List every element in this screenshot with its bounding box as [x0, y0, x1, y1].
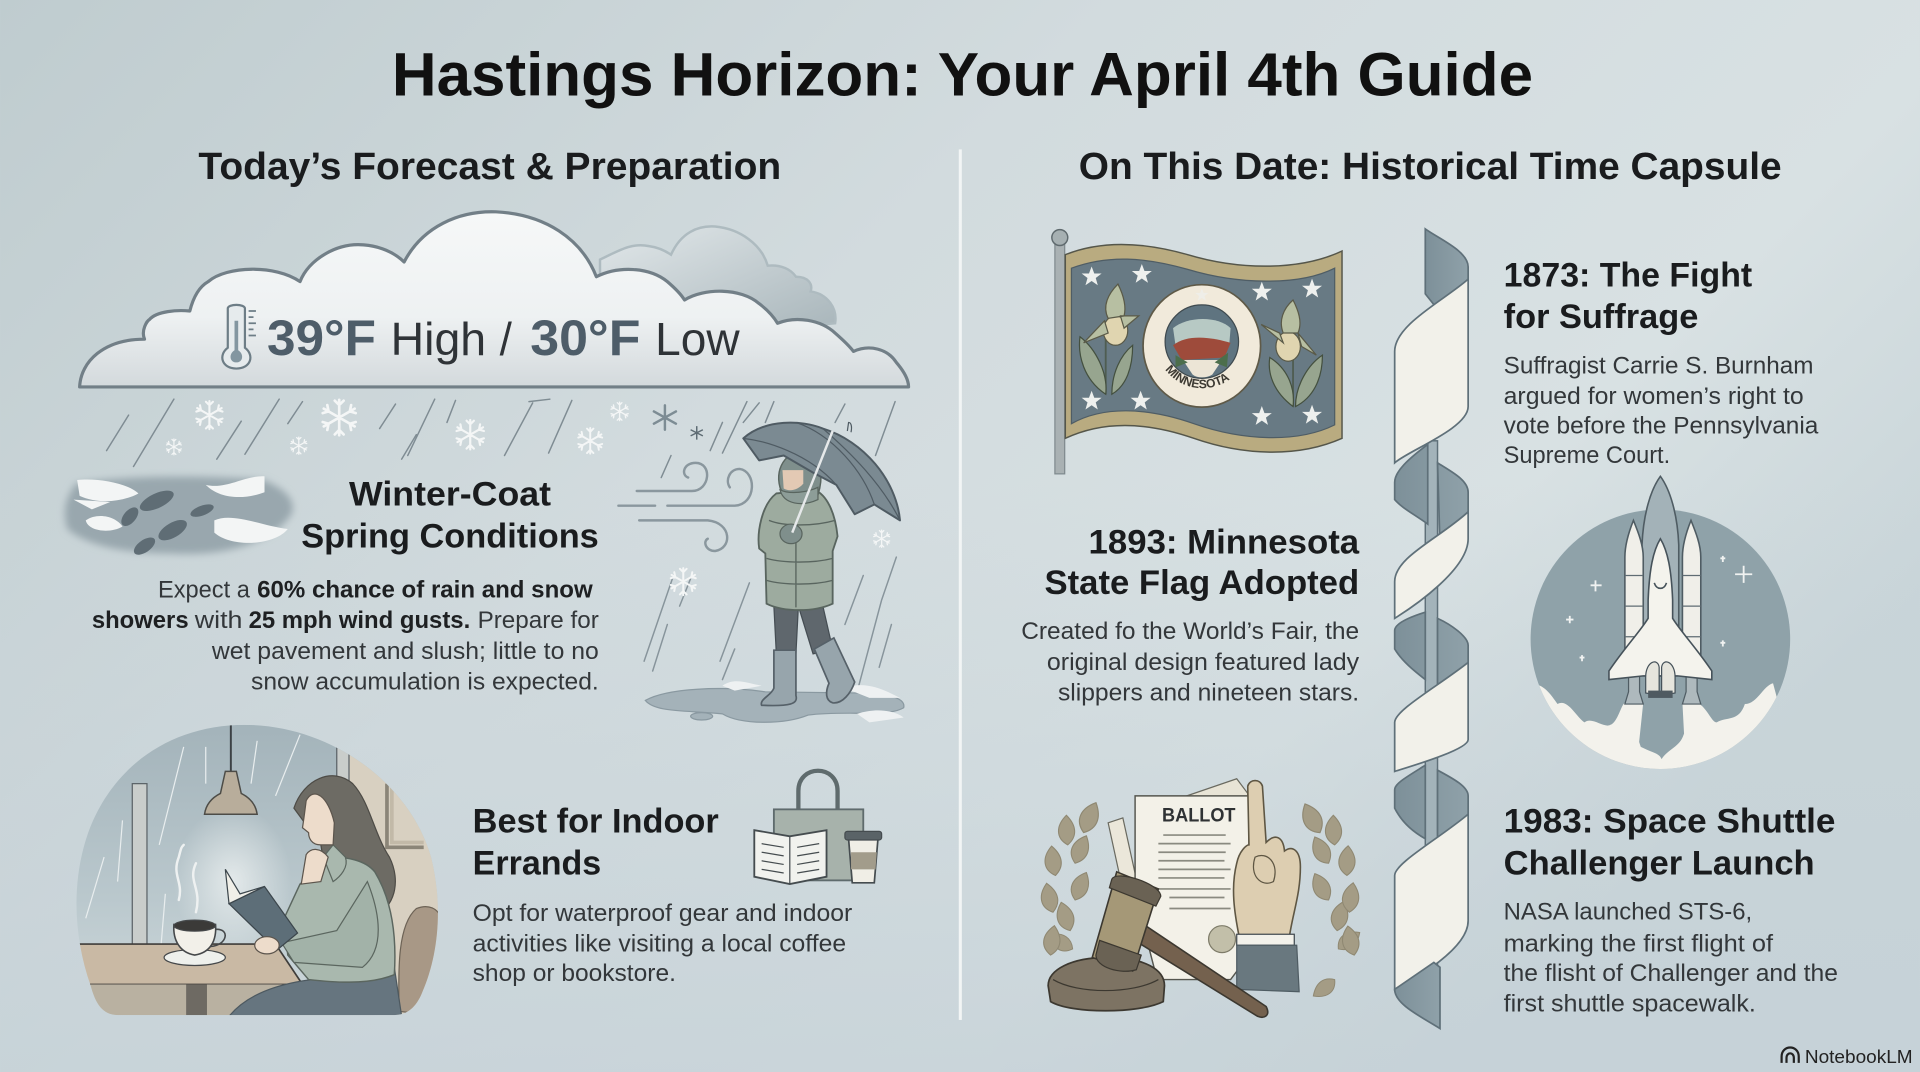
body: 1873 [1504, 352, 1819, 469]
puddle [645, 689, 904, 722]
heading: forecast: Today’s Forecast & Preparation [198, 146, 781, 188]
temperature readout: Low [655, 313, 740, 365]
face [302, 794, 334, 845]
heading: 1893: State Flag Adopted [1044, 564, 1359, 602]
body: rain and snow advice: 25 mph wind gusts. [249, 607, 470, 634]
hood and face [779, 450, 821, 501]
icon: space shuttle launch [1530, 475, 1790, 769]
heading: 1893: 1893: Minnesota [1089, 523, 1360, 561]
window frames [132, 784, 147, 949]
body: 1983: NASA launched STS-6, [1504, 899, 1752, 926]
stars [1566, 556, 1767, 686]
temperature readout: 39°F [267, 310, 376, 366]
hand on book [255, 937, 279, 954]
heading: 1983: 1983: Space Shuttle [1504, 803, 1835, 841]
illustration: person under umbrella in the rain [644, 422, 904, 722]
icon: thermometer [222, 305, 256, 369]
heading: 1893 [1044, 523, 1360, 602]
body: rain and snow advice: showers [92, 607, 189, 634]
event: 1983 space shuttle challenger launch [1504, 803, 1838, 1017]
text: winter-coat spring conditions [92, 476, 599, 695]
rain on glass [85, 734, 300, 944]
icon: rain and snow [107, 399, 895, 478]
body: indoor advice: activities like visiting a local coffee [473, 930, 846, 957]
body: indoor advice: Opt for waterproof gear and indoor [473, 900, 852, 927]
icon: wind swirls [618, 463, 752, 551]
body: 1893: slippers and nineteen stars. [1058, 679, 1359, 706]
rain lines [644, 557, 896, 692]
body: 1873: Supreme Court. [1504, 442, 1670, 469]
event: 1873 the fight for suffrage [1504, 257, 1819, 469]
umbrella [743, 423, 900, 520]
book [229, 886, 298, 950]
body: 1983: the flisht of Challenger and the [1504, 960, 1838, 987]
legs and boots [774, 606, 833, 654]
state seal: MINNESOTA [1166, 364, 1230, 388]
panel: today's forecast and preparation [65, 146, 909, 1021]
solid rocket boosters [1625, 520, 1701, 667]
text: best for indoor errands [473, 803, 852, 987]
hand on chin [301, 849, 328, 884]
icon: slushy puddle with footprints [65, 476, 293, 558]
divider [959, 149, 962, 1020]
event: 1893 minnesota state flag adopted [1021, 523, 1360, 706]
body: indoor advice [473, 900, 852, 987]
laurel wreaths [1039, 799, 1364, 1002]
heading: 1983: Challenger Launch [1504, 844, 1815, 882]
heading: history: On This Date: Historical Time Capsule [1079, 146, 1782, 188]
heading: 1983 [1504, 803, 1835, 882]
wall [350, 755, 438, 1014]
body: rain and snow advice: wet pavement and slush; little to no [211, 638, 599, 665]
hand and sleeve [1234, 781, 1300, 992]
chair [399, 907, 441, 1016]
illustration: woman reading in a cafe [67, 722, 447, 1021]
icon: main cloud with temperature [80, 212, 909, 387]
body: 1893: Created fo the World’s Fair, the [1021, 618, 1359, 645]
body: 1983: first shuttle spacewalk. [1504, 990, 1756, 1017]
heading: 1873 [1504, 257, 1752, 336]
orbiter [1609, 539, 1712, 680]
body: 1893: original design featured lady [1047, 649, 1360, 676]
gavel [1048, 872, 1268, 1017]
body: rain and snow advice: Expect a [158, 577, 250, 604]
body: rain and snow advice: snow accumulation is expected. [251, 668, 599, 695]
body: 1873: Suffragist Carrie S. Burnham [1504, 352, 1813, 379]
heading: winter-coat: Winter-Coat [349, 476, 551, 514]
lamp and glow [185, 818, 280, 940]
coat [759, 490, 838, 610]
body: indoor advice: shop or bookstore. [473, 960, 676, 987]
lady slippers [1079, 284, 1322, 407]
icon: back cloud [600, 226, 835, 328]
pants [229, 967, 402, 1016]
heading: 1873: for Suffrage [1504, 298, 1698, 336]
icon: tote bag, book and coffee [754, 771, 882, 884]
watermark: NotebookLM: NotebookLM [1805, 1046, 1913, 1067]
heading: 1873: 1873: The Fight [1504, 257, 1752, 295]
body: 1873: vote before the Pennsylvania [1504, 412, 1819, 439]
steam [176, 845, 197, 912]
icon: ballot, hand and gavel [1039, 779, 1364, 1017]
body: 1873: argued for women’s right to [1504, 383, 1804, 410]
body: rain and snow advice [92, 577, 599, 695]
title: Hastings Horizon: Your April 4th Guide [392, 41, 1533, 109]
exhaust [1626, 703, 1700, 749]
launch clouds [1539, 683, 1776, 769]
heading: indoor errands [473, 803, 719, 882]
heading: indoor errands: Best for Indoor [473, 803, 719, 841]
temperature readout: 30°F [530, 310, 640, 366]
sweater [284, 857, 395, 982]
ballot paper: BALLOT [1162, 805, 1236, 827]
body: 1893 [1021, 618, 1360, 706]
heading: indoor errands: Errands [473, 844, 601, 882]
temperature readout: High [391, 313, 486, 365]
temperature readout: / [500, 313, 512, 365]
external tank [1642, 476, 1679, 637]
body: 1983 [1504, 899, 1838, 1017]
panel: on this date historical time capsule [1021, 146, 1838, 1030]
icon: Minnesota state flag [1051, 228, 1343, 474]
body: 1983: marking the first flight of [1504, 930, 1773, 957]
body: rain and snow advice: with [194, 607, 242, 634]
ballot paper [1108, 779, 1249, 980]
cup and saucer [164, 950, 225, 965]
table [67, 944, 302, 984]
woman hair [294, 776, 395, 916]
state seal [1142, 284, 1262, 408]
body: rain and snow advice: Prepare for [478, 607, 599, 634]
timeline ribbon [1395, 229, 1468, 1029]
temperature readout [267, 310, 740, 366]
heading: winter-coat [301, 476, 599, 555]
heading: winter-coat: Spring Conditions [301, 517, 599, 555]
body: rain and snow advice: 60% chance of rain and snow [257, 577, 594, 604]
